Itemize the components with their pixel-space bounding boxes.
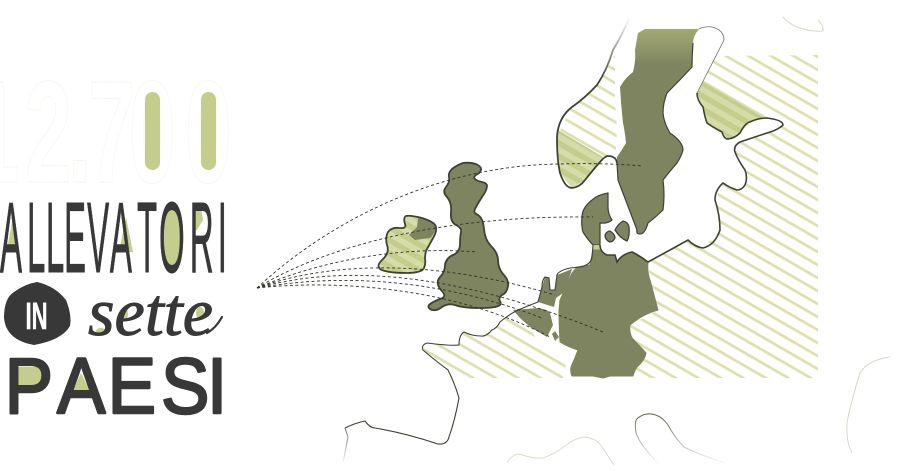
hatched land: Norway bbox=[557, 55, 617, 188]
country: Great Britain bbox=[428, 163, 508, 310]
country: Belgium bbox=[513, 308, 553, 337]
badge blob bbox=[4, 282, 70, 345]
country: Germany bbox=[559, 250, 658, 378]
Ireland north region bbox=[409, 218, 435, 240]
coast line: Finland and Baltic south bbox=[600, 93, 783, 262]
badge label: IN bbox=[26, 295, 48, 338]
country: Netherlands bbox=[538, 269, 572, 307]
coast line: Brittany fade bbox=[343, 428, 348, 463]
island: Funen bbox=[605, 231, 615, 242]
border strip: Schleswig bbox=[593, 245, 600, 250]
line to Sweden and Norway bbox=[257, 164, 643, 288]
script word: sette bbox=[88, 274, 222, 350]
green fills inside letters bbox=[18, 367, 92, 395]
faded coast: east bbox=[847, 357, 890, 453]
hatched land: eastern Europe bbox=[630, 55, 818, 378]
green zero counter left bbox=[145, 92, 160, 170]
script tail bbox=[207, 317, 222, 333]
faded coast: top right bbox=[783, 17, 823, 31]
line to Germany bbox=[257, 275, 603, 332]
heading word: PAESI bbox=[5, 342, 227, 431]
line to Netherlands bbox=[257, 268, 555, 295]
green zero counter right bbox=[201, 92, 216, 170]
coast line: Norway bbox=[557, 17, 630, 188]
faded coast: Italy bbox=[635, 414, 725, 463]
green fills inside letters bbox=[7, 204, 203, 270]
line to Belgium south bbox=[257, 285, 550, 337]
island: Zealand bbox=[615, 221, 629, 241]
dashed flow lines from origin to countries bbox=[257, 164, 643, 337]
script text: sette bbox=[88, 274, 213, 350]
hatched land: France bbox=[423, 311, 567, 378]
letters: PAESI bbox=[5, 342, 227, 431]
faded coast: Iberia bbox=[507, 437, 614, 465]
coast line: Sweden bbox=[617, 43, 693, 234]
highlighted band: southern Norway bbox=[557, 130, 603, 188]
country: Ireland bbox=[378, 216, 436, 273]
line to Denmark bbox=[257, 217, 593, 288]
Ireland outline bbox=[378, 216, 436, 273]
letters: ALLEVATORI bbox=[0, 182, 227, 293]
highlighted band: Finland bbox=[697, 82, 763, 139]
coast line: North Sea bbox=[345, 245, 593, 444]
green fill in letters bbox=[96, 307, 204, 334]
line to Ireland bbox=[257, 251, 477, 288]
heading word: ALLEVATORI bbox=[0, 182, 227, 293]
Ireland base bbox=[378, 216, 436, 273]
coast line: Finland inlet bbox=[697, 27, 724, 93]
line to Belgium bbox=[257, 280, 542, 318]
badge: IN bbox=[4, 282, 70, 345]
country: Sweden bbox=[617, 29, 699, 234]
country: Denmark bbox=[582, 193, 612, 245]
Belgium small exclave bbox=[552, 331, 559, 341]
map of northern Europe bbox=[343, 17, 890, 465]
headline number: 12.700 bbox=[0, 52, 232, 214]
